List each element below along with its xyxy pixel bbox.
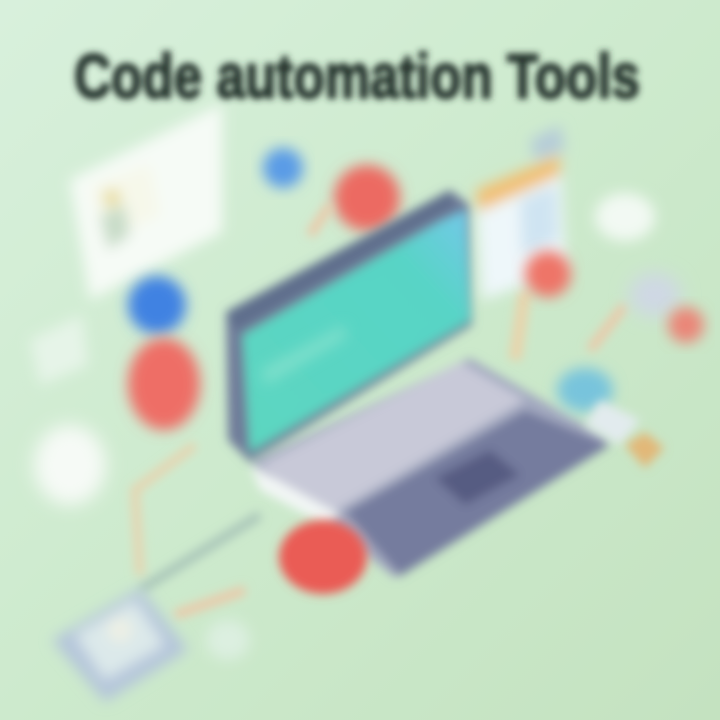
panel: faded card far right [629,273,681,317]
icon: small red circle far right [668,307,704,343]
screen highlight [262,325,345,385]
icon: small blue circle [263,148,303,188]
panel: white bubble left [34,425,106,505]
icon: large red circle bottom [279,520,367,594]
icon: red badge left [128,338,200,430]
connector lines lower left [135,205,625,615]
panel: small faded card left [30,315,88,385]
panel: tablet lower left [52,588,188,702]
icon: faint card bottom [206,620,250,660]
panel: white tab right [585,400,640,445]
laptop lid [226,190,472,462]
laptop base [250,358,610,578]
icon: red circle mid right [525,251,571,297]
panel: chart card upper right [476,125,566,300]
panel: document card upper left [70,104,222,300]
icon: blue circle left [128,276,186,334]
icon: orange square right [625,432,664,468]
illustration: laptop [226,190,610,578]
icon: white bubble right [595,193,655,241]
icon: red circle top [334,165,400,231]
icon: blue badge right of laptop [557,368,613,412]
